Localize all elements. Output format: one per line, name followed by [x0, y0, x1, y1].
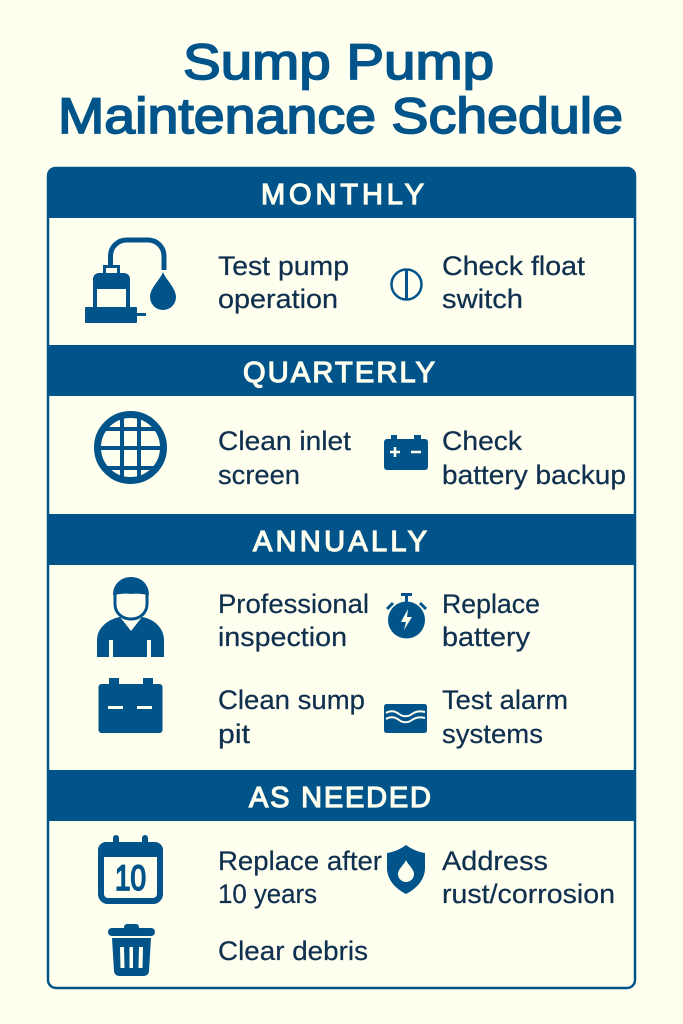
- text: professional inspection: [218, 589, 369, 652]
- heading: monthly: MONTHLY: [261, 179, 424, 211]
- panel: as needed: [47, 770, 636, 976]
- text: replace after 10 years: Replace after: [218, 846, 382, 876]
- text: test pump operation: [218, 251, 349, 314]
- text: replace battery: [442, 589, 540, 652]
- heading: annually: ANNUALLY: [253, 526, 427, 558]
- text: clean sump pit: [218, 685, 365, 749]
- text: replace after 10 years: [218, 846, 382, 909]
- title: [58, 34, 623, 144]
- text: clean sump pit: Clean sump: [218, 685, 365, 715]
- text: test alarm systems: Test alarm: [442, 685, 568, 715]
- heading: monthly: [47, 167, 636, 218]
- icon: float switch: [392, 270, 422, 300]
- text: address rust/corrosion: rust/corrosion: [442, 879, 615, 909]
- icon: shield with drop: [387, 845, 425, 894]
- text: professional inspection: Professional: [218, 589, 369, 619]
- text: clear debris: Clear debris: [218, 936, 368, 966]
- icon: backup battery: [384, 435, 428, 470]
- icon: stopwatch: [387, 593, 426, 638]
- icon: technician: [97, 577, 164, 657]
- text: professional inspection: inspection: [218, 622, 347, 652]
- panel: quarterly: [47, 345, 636, 490]
- title: Maintenance Schedule: [58, 88, 623, 144]
- text: test pump operation: operation: [218, 284, 338, 314]
- panel: annually: [47, 514, 636, 749]
- text: replace battery: battery: [442, 622, 531, 652]
- panel: schedule table: [47, 167, 636, 988]
- text: test pump operation: Test pump: [218, 251, 349, 281]
- heading: annually: [47, 514, 636, 565]
- text: clean inlet screen: Clean inlet: [218, 426, 352, 456]
- icon: calendar 10: [98, 838, 163, 901]
- text: check battery backup: [442, 426, 626, 490]
- text: clean inlet screen: [218, 426, 352, 490]
- text: test alarm systems: systems: [442, 719, 543, 749]
- text: address rust/corrosion: [442, 846, 615, 909]
- text: check battery backup: Check: [442, 426, 523, 456]
- heading: as needed: AS NEEDED: [249, 782, 431, 814]
- icon: sump pit box: [98, 678, 162, 733]
- icon: trash can: [108, 924, 155, 976]
- heading: quarterly: QUARTERLY: [243, 357, 435, 389]
- text: clean inlet screen: screen: [218, 460, 300, 490]
- text: replace after 10 years: 10 years: [218, 879, 317, 909]
- text: check battery backup: battery backup: [442, 460, 626, 490]
- icon: calendar 10: 10: [115, 859, 146, 898]
- heading: quarterly: [47, 345, 636, 396]
- text: test alarm systems: [442, 685, 568, 749]
- text: clean sump pit: pit: [218, 719, 251, 749]
- text: check float switch: Check float: [442, 251, 586, 281]
- text: check float switch: switch: [442, 284, 523, 314]
- text: address rust/corrosion: Address: [442, 846, 548, 876]
- heading: as needed: [47, 770, 636, 821]
- text: check float switch: [442, 251, 586, 314]
- text: replace battery: Replace: [442, 589, 540, 619]
- icon: alarm waves: [384, 704, 427, 733]
- icon: inlet screen: [97, 414, 164, 481]
- title: Sump Pump: [183, 34, 494, 90]
- icon: pump with water drop: [85, 240, 176, 323]
- panel: monthly: [47, 167, 636, 323]
